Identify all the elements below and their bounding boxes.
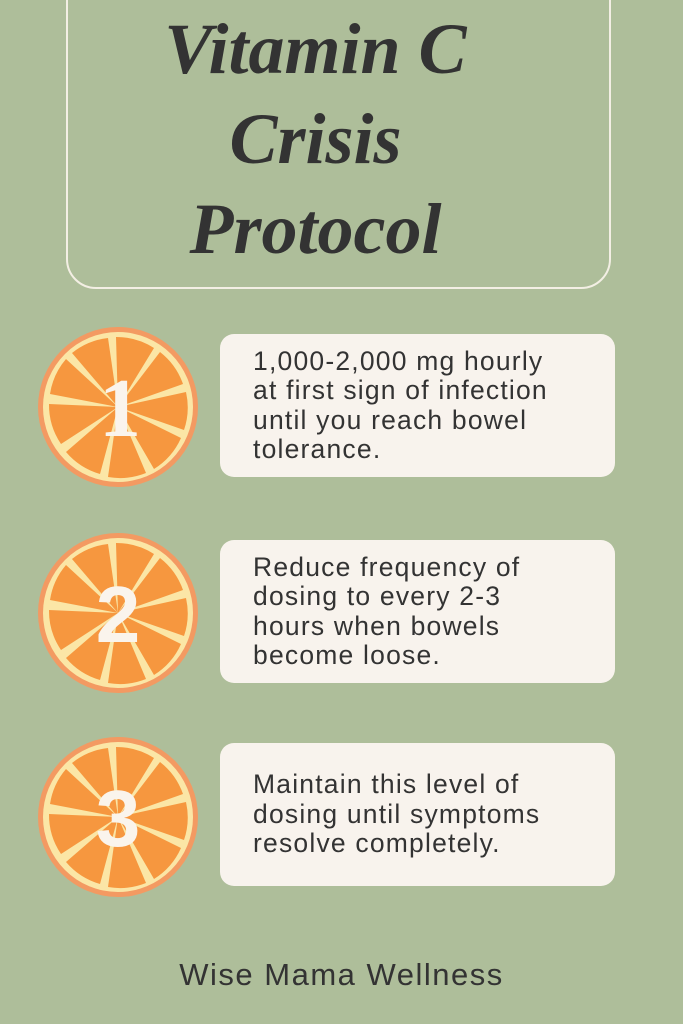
step 1 orange icon bbox=[38, 327, 198, 487]
step 2 card bbox=[220, 540, 615, 683]
step 3 card: dosing until symptoms bbox=[253, 799, 540, 829]
title box bbox=[66, 0, 611, 289]
step 1 card: until you reach bowel bbox=[253, 404, 527, 434]
step 3 orange icon: 3 bbox=[96, 774, 140, 863]
title: Protocol bbox=[190, 189, 441, 269]
step 2 card: Reduce frequency of bbox=[253, 552, 520, 582]
step 2 card: dosing to every 2-3 bbox=[253, 581, 501, 611]
step 1 card bbox=[220, 334, 615, 477]
footer: Wise Mama Wellness bbox=[179, 957, 504, 992]
step 1 card: tolerance. bbox=[253, 434, 381, 464]
step 3 card bbox=[220, 743, 615, 886]
step 2 card: become loose. bbox=[253, 640, 441, 670]
title: Vitamin C bbox=[164, 9, 467, 89]
step 1 card: 1,000-2,000 mg hourly bbox=[253, 346, 543, 376]
step 2 orange icon: 2 bbox=[96, 570, 140, 659]
step 1 orange icon: 1 bbox=[99, 362, 141, 455]
step 3 card: resolve completely. bbox=[253, 828, 501, 858]
step 2 orange icon bbox=[38, 533, 198, 693]
step 3 card: Maintain this level of bbox=[253, 769, 520, 799]
title: Crisis bbox=[229, 99, 402, 179]
title bbox=[164, 9, 468, 269]
step 1 card: at first sign of infection bbox=[253, 375, 548, 405]
step 3 orange icon bbox=[38, 737, 198, 897]
step 2 card: hours when bowels bbox=[253, 610, 500, 640]
